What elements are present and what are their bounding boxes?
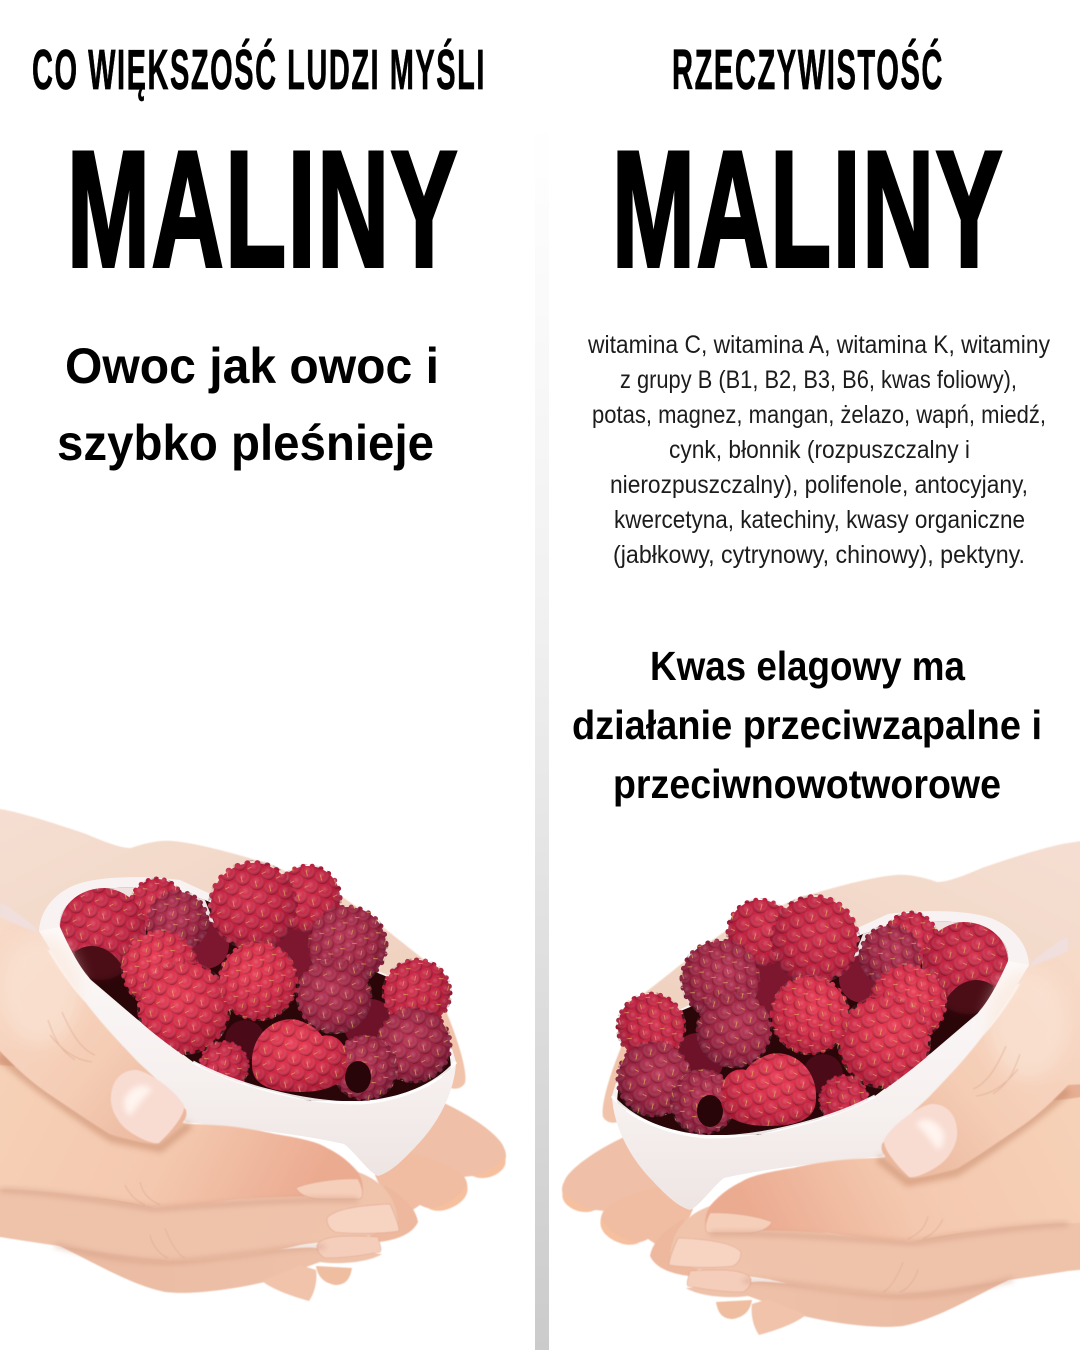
text block: common belief: Owoc jak owoc i xyxy=(65,338,439,394)
text block: list of nutrients: witamina C, witamina A, witamina K, witaminy xyxy=(587,331,1050,359)
front hand with nails, mirrored xyxy=(669,937,1080,1335)
bowl interior, mirrored xyxy=(612,911,1029,1144)
title: MALINY left: MALINY xyxy=(67,117,459,301)
photo: hands holding bowl of raspberries, left xyxy=(0,806,506,1301)
text block: list of nutrients: cynk, błonnik (rozpuszczalny i xyxy=(669,436,970,464)
text block: common belief xyxy=(57,338,439,471)
bowl front wall, mirrored xyxy=(612,961,1029,1210)
back hand and fingertips, mirrored xyxy=(562,840,1080,1276)
heading: left column: CO WIĘKSZOŚĆ LUDZI MYŚLI xyxy=(32,38,486,102)
bowl interior xyxy=(39,877,456,1110)
panel: reality xyxy=(562,38,1080,1335)
text block: ellagic acid benefit xyxy=(572,643,1042,807)
text block: ellagic acid benefit: działanie przeciwzapalne i xyxy=(572,702,1042,748)
back hand and fingertips xyxy=(0,806,506,1242)
front hand with nails xyxy=(0,903,399,1301)
panel: what most people think xyxy=(0,38,506,1301)
text block: list of nutrients: kwercetyna, katechiny, kwasy organiczne xyxy=(614,506,1025,534)
text block: list of nutrients: (jabłkowy, cytrynowy, chinowy), pektyny. xyxy=(613,541,1025,569)
text block: ellagic acid benefit: Kwas elagowy ma xyxy=(650,643,966,689)
raspberries xyxy=(60,860,452,1101)
text block: list of nutrients xyxy=(587,331,1050,569)
text block: list of nutrients: z grupy B (B1, B2, B3, B6, kwas foliowy), xyxy=(620,366,1017,394)
photo: hands holding bowl of raspberries, right (mirrored) xyxy=(562,840,1080,1335)
raspberries, mirrored xyxy=(616,894,1008,1135)
text block: list of nutrients: nierozpuszczalny), polifenole, antocyjany, xyxy=(610,471,1028,499)
vertical divider between columns xyxy=(535,120,549,1350)
text block: common belief: szybko pleśnieje xyxy=(57,415,434,471)
bowl front wall xyxy=(39,927,456,1176)
text block: ellagic acid benefit: przeciwnowotworowe xyxy=(613,761,1001,807)
